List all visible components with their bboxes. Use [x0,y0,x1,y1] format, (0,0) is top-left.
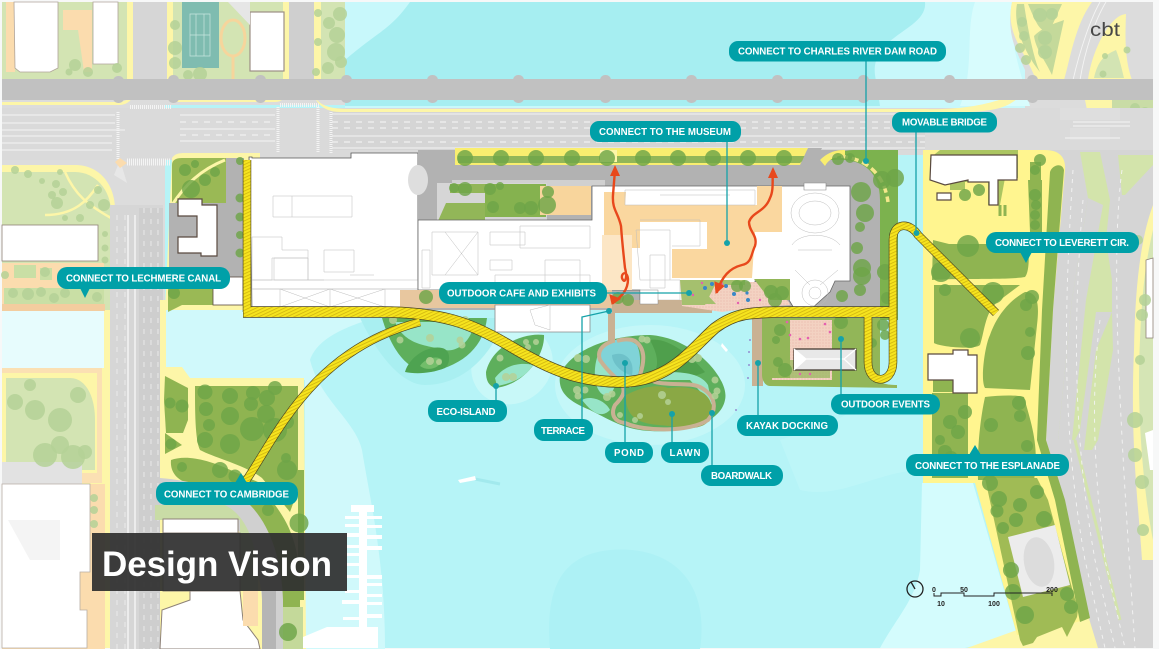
label: terrace: TERRACE [541,426,586,437]
label: connect to cambridge: CONNECT TO CAMBRIDGE [164,490,290,500]
main convention building [249,153,418,307]
esplanade east land [923,150,1098,648]
Lechmere block trees [168,157,244,299]
label: terrace [534,308,612,441]
label: lawn: LAWN [670,448,700,459]
scale bar and north compass [907,581,1058,608]
label: movable bridge [892,112,997,236]
water tones [165,155,1063,649]
river water, north [345,2,1030,108]
scale bar and north compass: 0 [932,587,936,594]
label: outdoor cafe and exhibits [439,282,692,304]
north tree row [449,150,904,304]
label: outdoor events [831,336,940,414]
central building footprint [418,183,850,310]
label: kayak docking: KAYAK DOCKING [746,421,828,432]
west park trees [1,166,110,528]
label: connect to the museum: CONNECT TO THE MUSEUM [599,127,731,138]
label: movable bridge: MOVABLE BRIDGE [902,118,988,128]
red circulation arrows [610,165,778,304]
Lechmere side park and building [165,153,260,312]
label: connect to charles river dam road: CONNECT TO CHARLES RIVER DAM ROAD [738,46,937,58]
main island with pond and lawn [560,313,725,431]
label: connect to leverett cir. [986,232,1139,263]
label: connect to the museum [590,121,741,246]
outdoor events site [735,315,897,411]
Cambridge park trees [164,381,308,641]
label: connect to the esplanade [906,445,1069,476]
scale bar and north compass: 100 [988,601,1000,608]
label: connect to the esplanade: CONNECT TO THE ESPLANADE [915,461,1061,472]
label: pond: POND [614,448,644,459]
esplanade trees [931,154,1078,624]
label: connect to cambridge [156,473,298,505]
label: outdoor events: OUTDOOR EVENTS [841,400,931,410]
ne pale trees [1015,8,1150,121]
marina docks [303,505,382,648]
northeast park [1010,2,1153,125]
label: pond [605,360,653,463]
Cambridge side park [155,300,306,649]
label: connect to lechmere canal [57,267,230,298]
scale bar and north compass: 50 [960,587,968,594]
boats [458,343,728,484]
elevated highway [2,75,1153,103]
northwest pale trees [66,7,347,81]
label: boardwalk [701,410,783,486]
label: outdoor cafe and exhibits: OUTDOOR CAFE AND EXHIBITS [447,288,597,300]
label: boardwalk: BOARDWALK [711,471,772,482]
cafe trees and seating [419,280,848,307]
hatched yellow bridge [243,160,996,485]
west-side boulevard [110,158,170,649]
label: connect to charles river dam road [729,41,946,164]
label: eco-island [428,383,507,422]
cbt logo: cbt [1090,20,1121,41]
label: connect to lechmere canal: CONNECT TO LECHMERE CANAL [66,274,221,284]
title: design vision [92,533,347,591]
scale bar and north compass: 200 [1046,587,1058,594]
label: kayak docking [737,360,838,436]
label: eco-island: ECO-ISLAND [436,407,496,418]
main east-west road [2,98,1153,160]
eco-island north [382,316,487,373]
cafe strip and boardwalk spur [400,279,790,343]
central plaza and roads [408,148,898,320]
west park, Lechmere canal side [2,165,115,649]
label: connect to leverett cir.: CONNECT TO LEVERETT CIR. [995,238,1129,249]
scale bar and north compass: 10 [937,601,945,608]
eco-island south [486,335,544,388]
east highway lanes [1045,108,1153,648]
label: lawn [661,411,709,463]
northwest neighbourhood [2,2,345,82]
title: design vision: Design Vision [102,545,332,584]
